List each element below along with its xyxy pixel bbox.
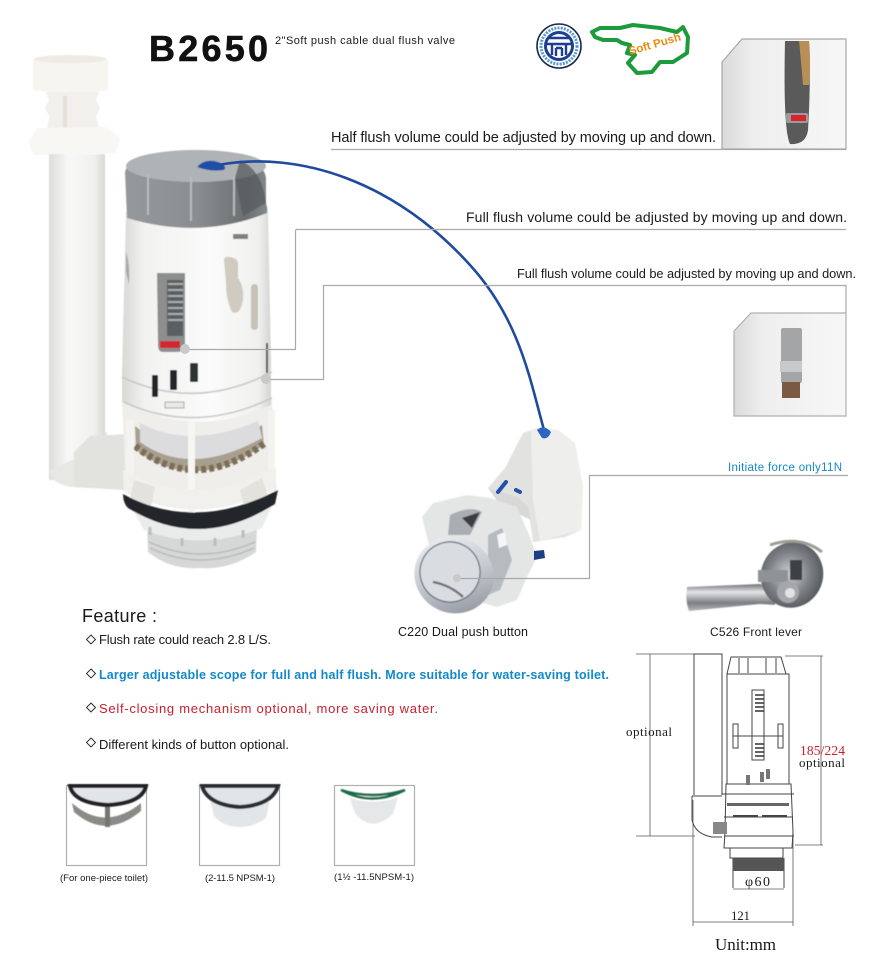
- icon: soft push hand logo: Soft Push: [628, 32, 682, 58]
- callout: full flush inset photo: [734, 313, 846, 416]
- callout: full flush text one: Full flush volume could be adjusted by moving up and down.: [466, 209, 847, 225]
- diagram: blue push cable: [218, 161, 544, 430]
- caption: 1.5 NPSM: (1½ -11.5NPSM-1): [334, 872, 414, 883]
- heading: feature: Feature :: [82, 606, 157, 626]
- title: model number: B2650: [149, 28, 268, 69]
- caption: C220: C220 Dual push button: [398, 625, 528, 639]
- grey cap: [125, 150, 267, 228]
- inner disc and teeth: [135, 425, 264, 471]
- main cylinder: [122, 212, 271, 422]
- panel: one-piece toilet option: [66, 786, 146, 866]
- diagram: technical drawing with dimensions: [636, 654, 823, 926]
- callout: half flush inset photo: [722, 39, 846, 149]
- dimension label: optional left: optional: [626, 724, 672, 739]
- unit note: Unit:mm: [715, 935, 776, 954]
- dimension label: diameter: φ60: [745, 875, 770, 890]
- text block: feature list: Different kinds of button optional.: [99, 737, 289, 752]
- icon: certification seal: [537, 24, 581, 68]
- black seal: [123, 490, 278, 529]
- callout: half flush text: Half flush volume could be adjusted by moving up and down.: [331, 130, 716, 146]
- text block: feature list: Larger adjustable scope for full and half flush. More suitable for water-saving toilet.: [99, 668, 609, 682]
- dimension label: width: 121: [731, 908, 750, 923]
- subtitle: 2"Soft push cable dual flush valve: [275, 35, 455, 47]
- caption: C526: C526 Front lever: [710, 625, 802, 639]
- dimension label: height range: 185/224: [800, 743, 845, 758]
- callout: full flush text two: Full flush volume could be adjusted by moving up and down.: [517, 266, 856, 281]
- lower cage: [122, 400, 277, 492]
- leader lines: [180, 150, 846, 384]
- callout: button leader line: [453, 476, 848, 582]
- text block: feature list: Flush rate could reach 2.8 L/S.: [99, 632, 271, 647]
- diagram: riser overflow tube: [28, 55, 128, 490]
- text block: feature list: [86, 632, 609, 752]
- thread: [147, 525, 257, 568]
- diagram: front lever: [686, 533, 832, 617]
- diagram: push button with cable housing: [402, 427, 583, 626]
- icon: soft push hand logo: [592, 25, 688, 73]
- white collar under seal: [132, 506, 272, 541]
- callout: initiate force: Initiate force only11N: [728, 462, 842, 474]
- dimension label: optional right: optional: [799, 755, 845, 770]
- panel: 1.5-11.5 NPSM option: [334, 786, 414, 866]
- diagram: valve body: [122, 150, 278, 568]
- text block: feature list: Self-closing mechanism optional, more saving water.: [99, 701, 438, 716]
- slots: [224, 257, 243, 313]
- panel: 2-11.5 NPSM option: [200, 786, 280, 866]
- caption: one-piece: (For one-piece toilet): [60, 873, 148, 884]
- caption: NPSM: (2-11.5 NPSM-1): [205, 873, 275, 884]
